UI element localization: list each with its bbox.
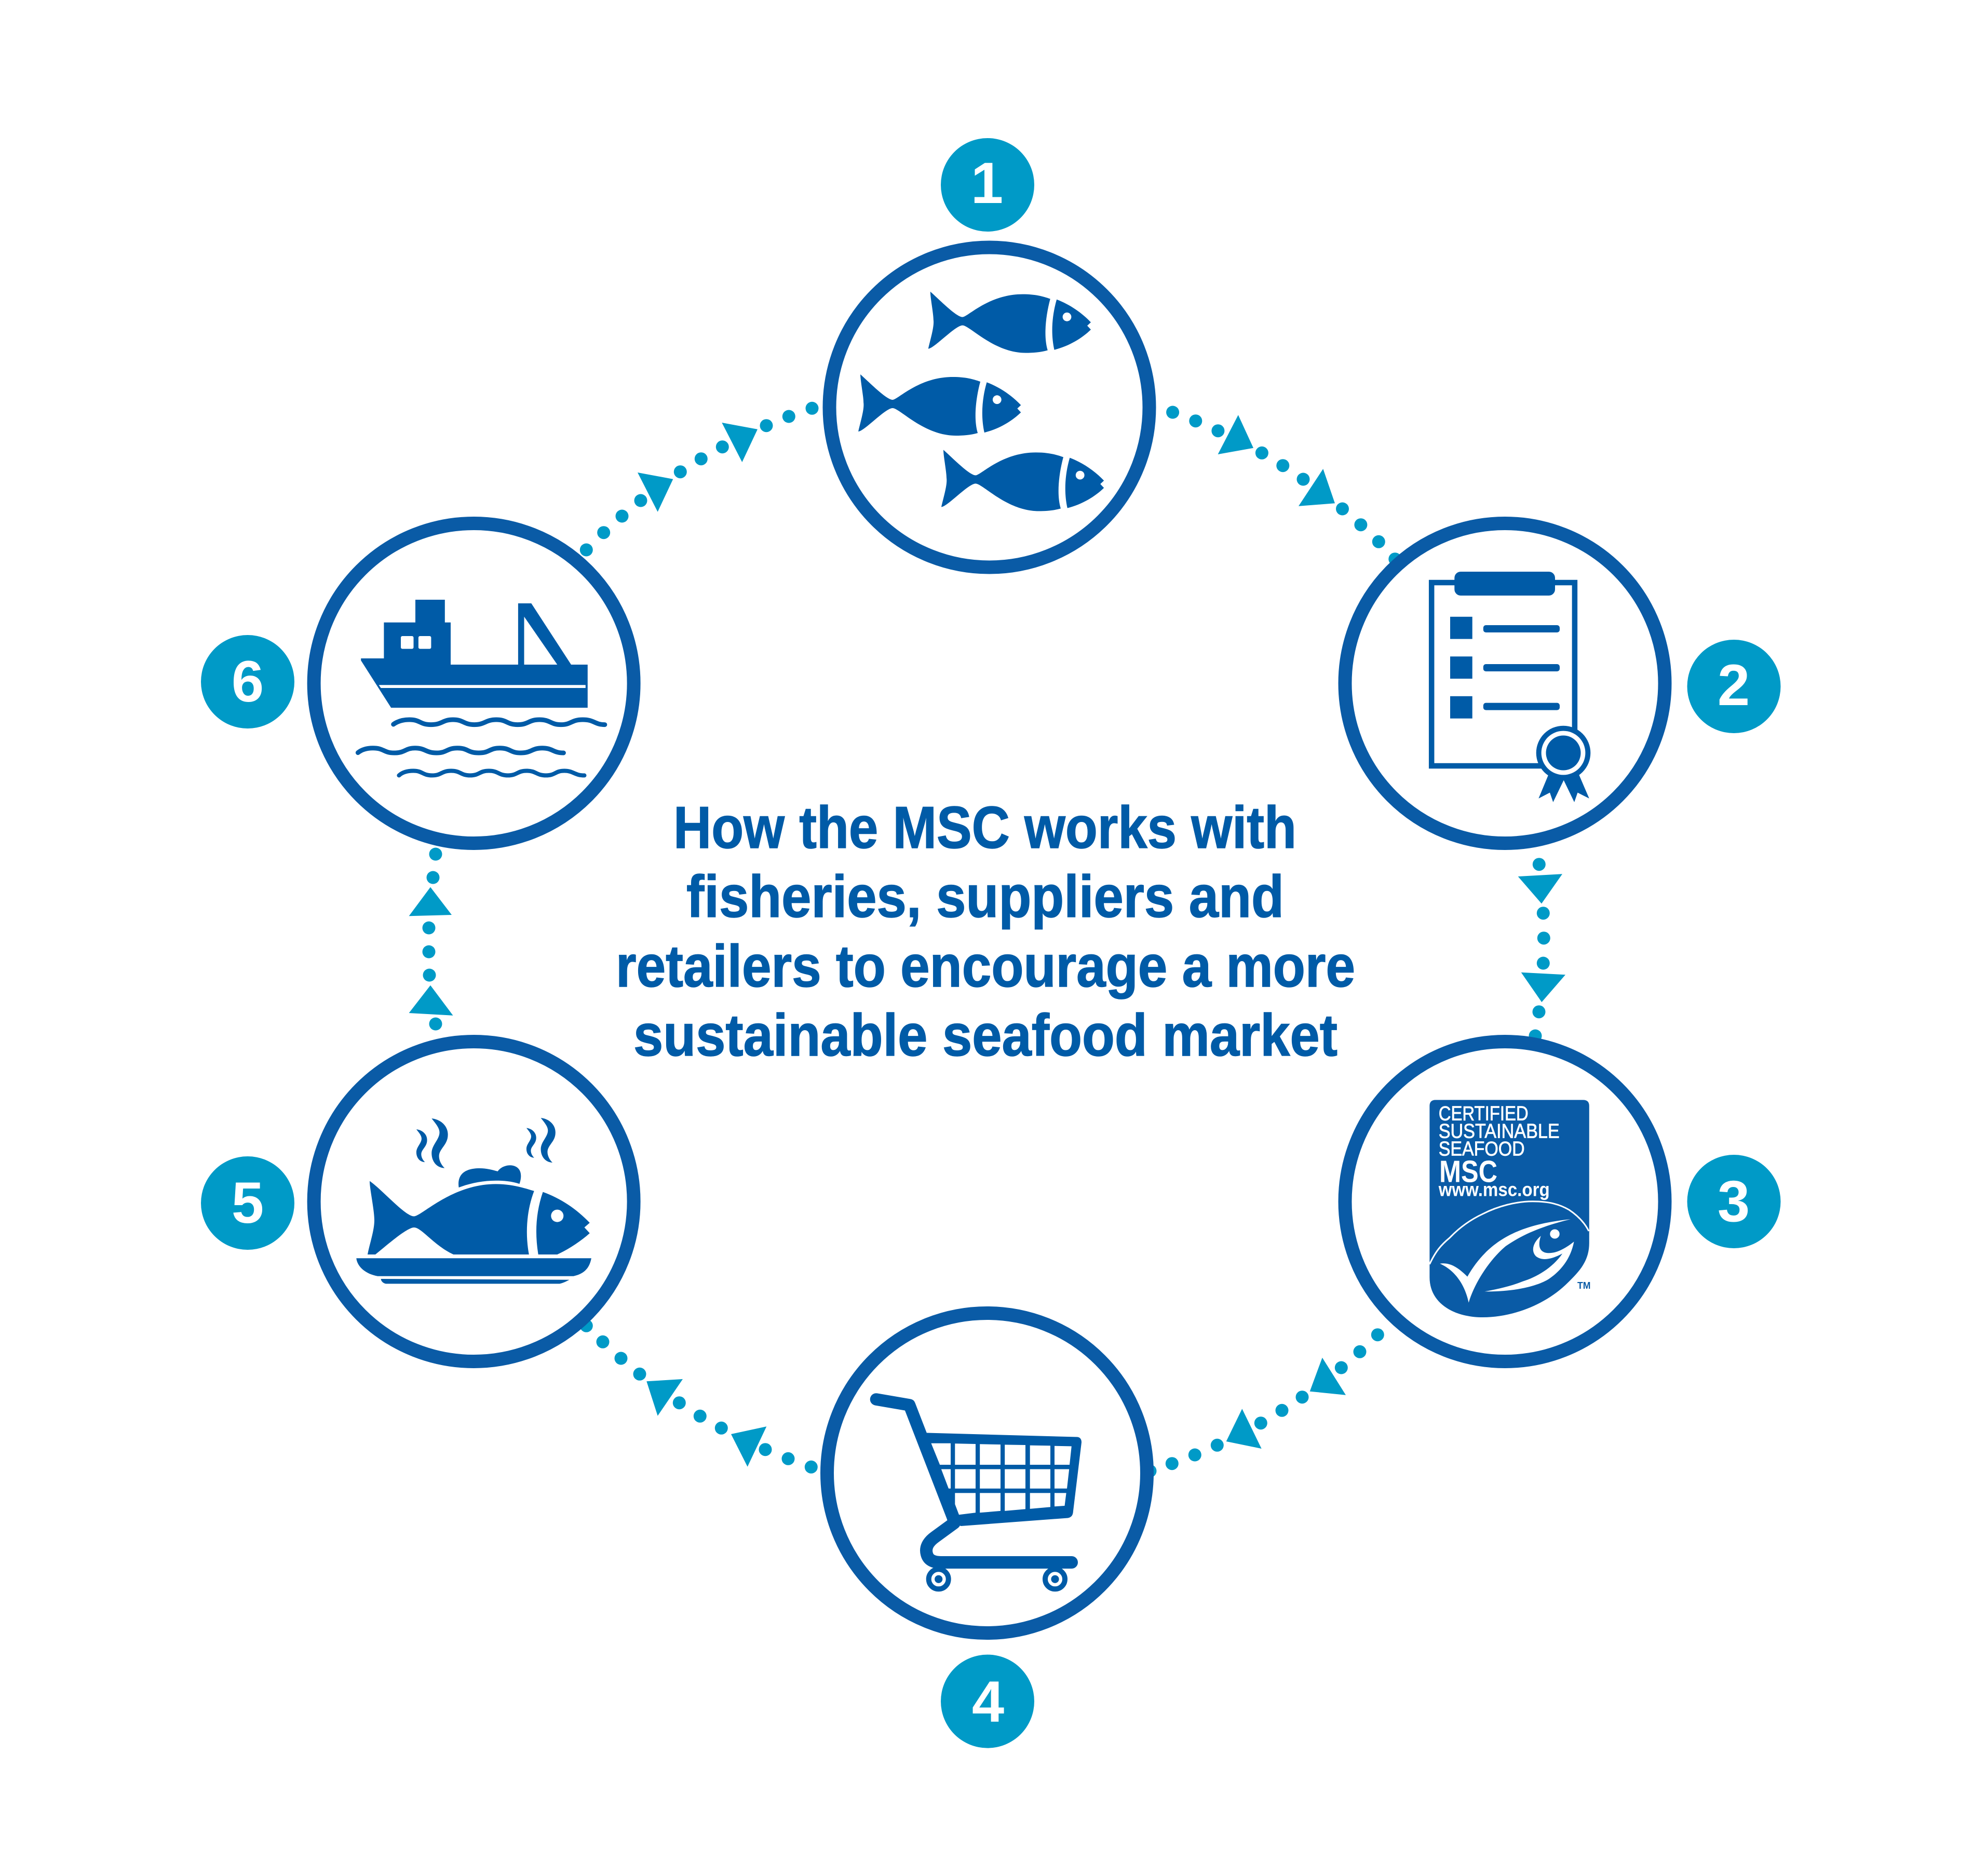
icon: MSC label: SEAFOOD: [1439, 1138, 1525, 1160]
title: [616, 795, 1355, 1069]
step 3: MSC ecolabel: [1345, 1042, 1781, 1361]
ring 5: [314, 1042, 634, 1361]
icon: MSC label: SUSTAINABLE: [1439, 1120, 1560, 1142]
icon: clipboard with rosette: [1431, 572, 1590, 802]
badge 5: [201, 1156, 294, 1250]
ring 1: [830, 247, 1150, 567]
badge 2: [1687, 640, 1781, 733]
step 2: certification checklist: [1345, 523, 1781, 843]
title: fisheries, suppliers and: [686, 864, 1284, 930]
badge 3: [1687, 1155, 1781, 1248]
icon: MSC label: CERTIFIED: [1439, 1103, 1529, 1125]
step 6: fishing boat: [201, 523, 634, 843]
badge 6: [201, 635, 294, 728]
icon: MSC label: TM: [1577, 1280, 1591, 1291]
icon: three fish: [858, 292, 1104, 511]
title: How the MSC works with: [673, 795, 1296, 861]
icon: shopping cart: [876, 1399, 1082, 1589]
ring 3: [1345, 1042, 1665, 1361]
icon: fish on plate with steam: [356, 1118, 591, 1284]
badge 3: 3: [1718, 1169, 1750, 1234]
badge 4: [941, 1655, 1034, 1748]
title: retailers to encourage a more: [616, 934, 1355, 1000]
ring 4: [827, 1313, 1147, 1633]
icon: boat on waves: [358, 600, 605, 775]
arrow path: step 5 to step 6: [409, 847, 453, 1030]
badge 4: 4: [972, 1669, 1004, 1734]
badge 5: 5: [232, 1170, 264, 1235]
arrow path: step 4 to step 5: [580, 1319, 818, 1474]
arrow path: step 6 to step 1: [580, 402, 818, 557]
ring 6: [314, 523, 634, 843]
arrow path: step 3 to step 4: [1143, 1328, 1384, 1478]
badge 1: [941, 138, 1034, 232]
badge 6: 6: [232, 649, 264, 714]
icon: MSC label: [1429, 1100, 1591, 1317]
arrow path: step 1 to step 2: [1166, 406, 1401, 565]
icon: MSC label: www.msc.org: [1438, 1179, 1550, 1200]
step 4: retail: [827, 1313, 1147, 1748]
badge 1: 1: [971, 151, 1003, 215]
step 5: cooked fish on a plate: [201, 1042, 634, 1361]
step 1: fish stocks: [830, 138, 1150, 567]
arrow path: step 2 to step 3: [1518, 858, 1565, 1043]
ring 2: [1345, 523, 1665, 843]
icon: MSC label: MSC: [1439, 1155, 1497, 1189]
title: sustainable seafood market: [633, 1003, 1337, 1069]
badge 2: 2: [1718, 653, 1750, 718]
